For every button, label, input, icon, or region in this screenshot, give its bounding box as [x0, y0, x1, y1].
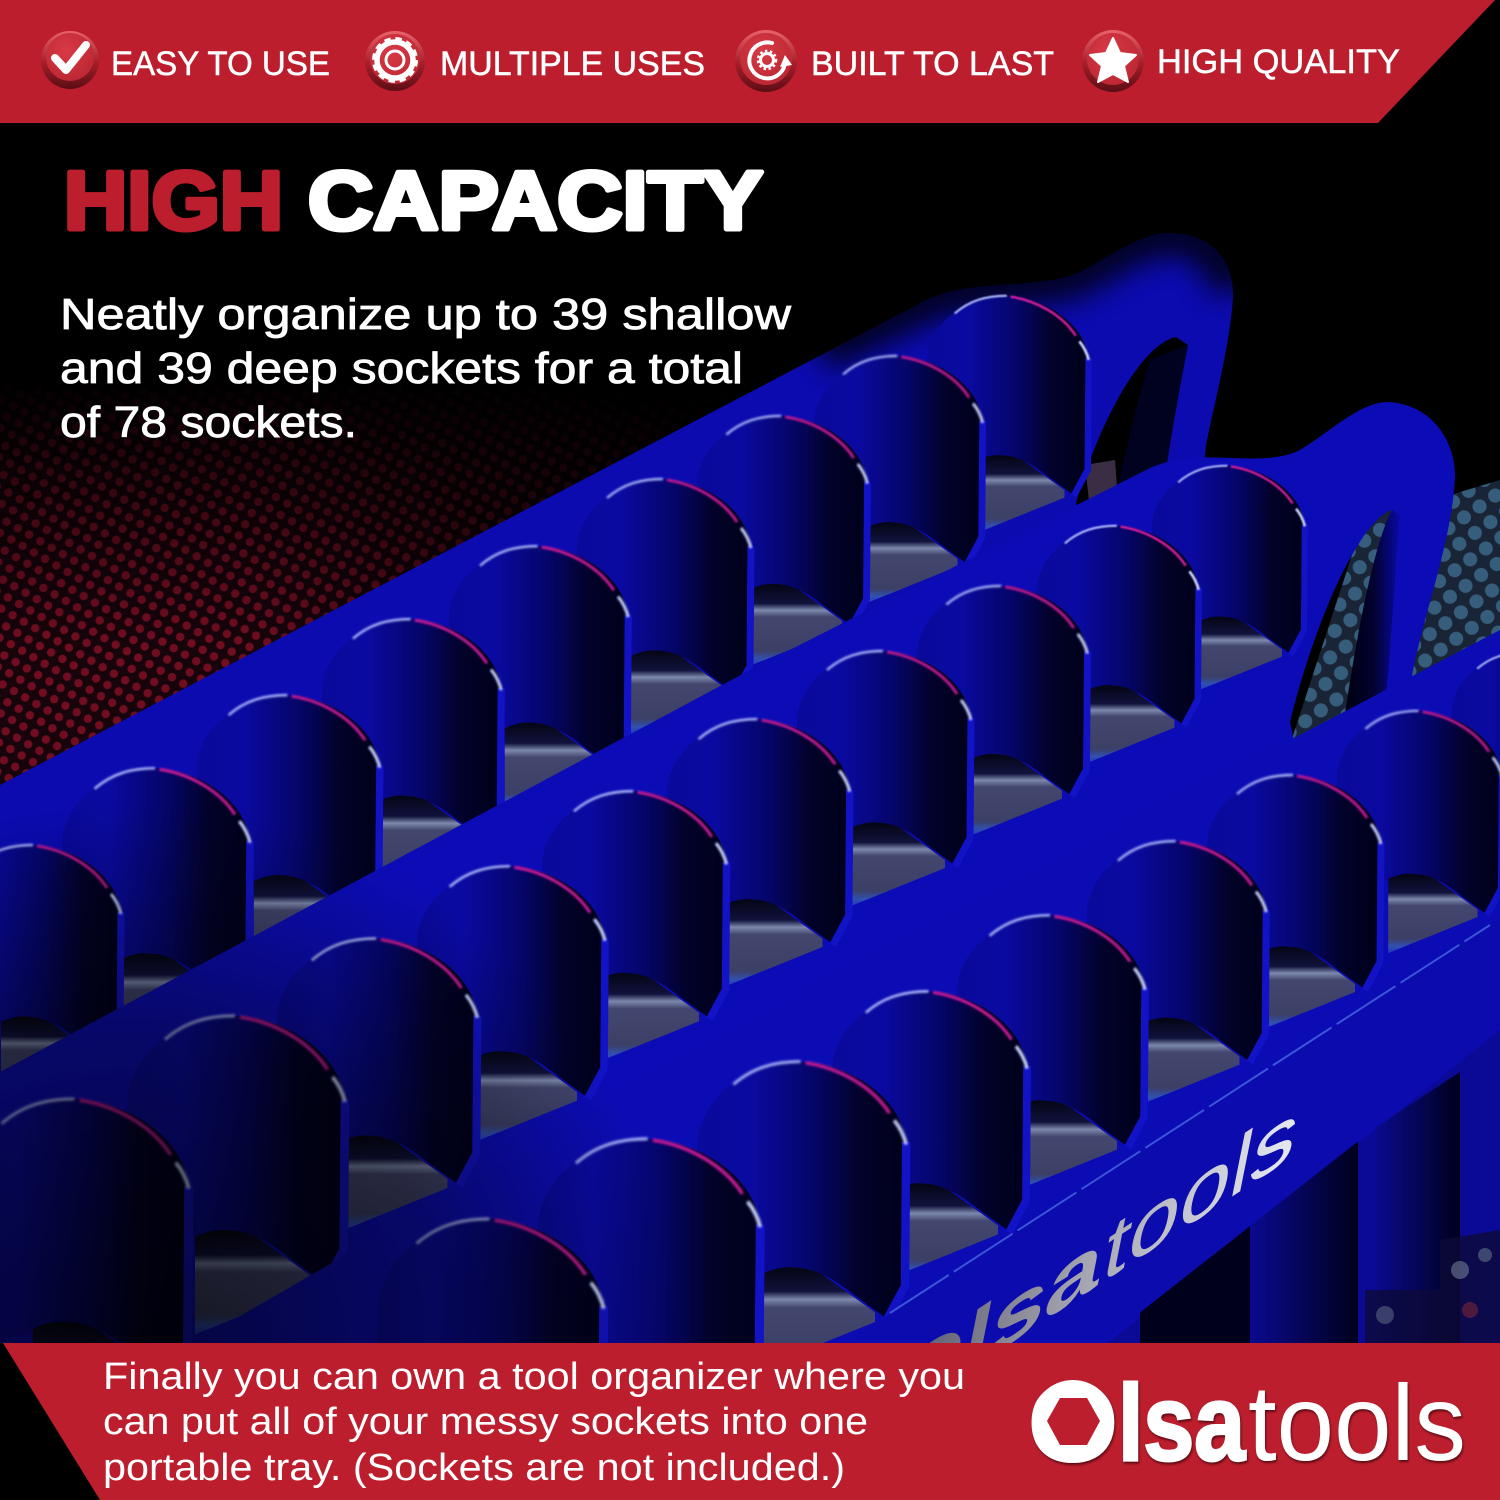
banner text: can put all of your messy sockets into one: [103, 1401, 868, 1443]
blurred mat visible under tray: [1365, 1230, 1500, 1345]
tray 2 body and handle: [0, 402, 1455, 1345]
title: [64, 154, 763, 247]
icon: gear: [365, 31, 425, 91]
title: HIGH: [64, 154, 283, 247]
logo: tools: [1248, 1362, 1466, 1483]
bottom banner: [0, 1343, 1500, 1500]
banner text: portable tray. (Sockets are not included.): [103, 1447, 845, 1489]
banner text: Finally you can own a tool organizer where you: [103, 1356, 965, 1398]
label: easy to use: EASY TO USE: [111, 45, 330, 83]
banner shape: [0, 0, 1495, 123]
handle shade: [820, 233, 1233, 350]
tray: front row: [190, 630, 1500, 1500]
icon: check mark: [41, 31, 99, 89]
label: multiple uses: MULTIPLE USES: [440, 45, 705, 83]
strip edge highlight: [890, 925, 1490, 1313]
background: teal mesh mat: [1085, 460, 1500, 760]
banner text: [103, 1356, 965, 1489]
front row sockets: [378, 653, 1500, 1500]
engraved logo on strip: [876, 1077, 1308, 1448]
title: CAPACITY: [308, 154, 763, 247]
handle 1 inner wall: [1110, 345, 1188, 530]
icon: gear with circular arrow: [735, 30, 797, 92]
description text: [60, 290, 791, 447]
middle row sockets: [0, 466, 1305, 1430]
logo strip: [850, 918, 1500, 1340]
label: built to last: BUILT TO LAST: [811, 45, 1054, 83]
description text: Neatly organize up to 39 shallow: [60, 290, 791, 339]
background: red mesh mat: [0, 380, 820, 810]
handle 2 inner wall: [1342, 510, 1400, 735]
logo: lsa: [1118, 1362, 1246, 1483]
banner shape: [3, 1343, 1500, 1500]
tray: middle row: [0, 402, 1455, 1430]
logo: O: [1029, 1362, 1117, 1483]
description text: and 39 deep sockets for a total: [60, 344, 743, 393]
front wall slots below the strip: [1105, 1030, 1500, 1345]
description text: of 78 sockets.: [60, 398, 357, 447]
tray 3 body: [190, 630, 1500, 1345]
logo: [1029, 1362, 1466, 1483]
tray 1 body and handle: [0, 233, 1233, 1100]
tray: back row: [0, 233, 1233, 1100]
engraved logo on strip: Olsa: [876, 1205, 1115, 1448]
icon: star: [1082, 30, 1144, 92]
engraved logo on strip: tools: [1095, 1077, 1308, 1303]
top banner: [0, 0, 1495, 123]
back row sockets: [0, 296, 1089, 1100]
shadow over lower-left foreground: [0, 800, 700, 1345]
label: high quality: HIGH QUALITY: [1157, 43, 1400, 81]
black corner under banner: [0, 1343, 120, 1500]
